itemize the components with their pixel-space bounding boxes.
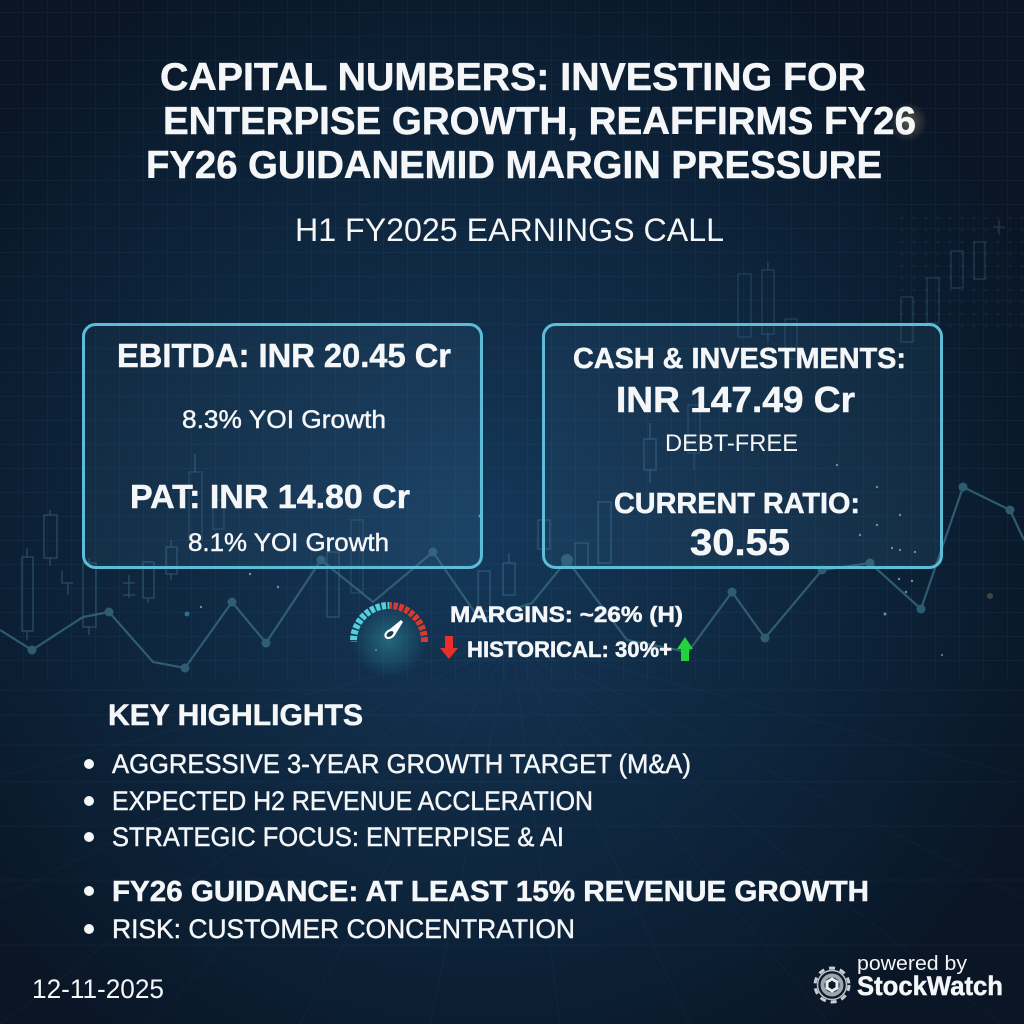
date: 12-11-2025 [32,974,164,1004]
particles [184,464,993,656]
highlight 5: RISK: CUSTOMER CONCENTRATION [112,914,575,944]
current ratio value: 30.55 [690,522,790,563]
highlight 2: EXPECTED H2 REVENUE ACCLERATION [112,786,593,816]
highlight 4: FY26 GUIDANCE: AT LEAST 15% REVENUE GROWTH [112,876,869,908]
title: FY26 GUIDANEMID MARGIN PRESSURE [146,144,882,187]
logo: powered by StockWatch [815,953,1003,1002]
cash label: CASH & INVESTMENTS: [573,343,906,375]
EBITDA growth: 8.3% YOI Growth [182,406,386,434]
icon: gear [815,968,849,1002]
cash value: INR 147.49 Cr [616,379,855,420]
key highlights list [84,749,869,944]
PAT growth: 8.1% YOI Growth [188,529,389,557]
PAT value: PAT: INR 14.80 Cr [130,478,410,515]
icon: margin gauge [351,602,427,678]
highlight 1: AGGRESSIVE 3-YEAR GROWTH TARGET (M&A) [112,749,691,779]
icon: green up arrow [677,637,693,661]
logo: powered by StockWatch: powered by [857,953,967,975]
debt free: DEBT-FREE [665,430,798,457]
heading: key highlights: KEY HIGHLIGHTS [108,699,363,732]
margins text: MARGINS: ~26% (H) [450,602,683,627]
EBITDA value: EBITDA: INR 20.45 Cr [117,337,451,374]
icon: red down arrow [440,636,458,659]
highlight 3: STRATEGIC FOCUS: ENTERPISE & AI [112,822,564,852]
panel: cash and current ratio [544,324,942,568]
current ratio label: CURRENT RATIO: [614,488,860,520]
background line chart [0,482,1024,672]
title: ENTERPISE GROWTH, REAFFIRMS FY26 [163,100,916,143]
historical text: HISTORICAL: 30%+ [467,637,672,662]
logo: powered by StockWatch: StockWatch [857,971,1003,1001]
background candlesticks [22,220,1005,640]
subtitle: H1 FY2025 EARNINGS CALL [295,212,724,248]
panel: EBITDA and PAT [84,324,482,568]
title [146,56,916,187]
title: CAPITAL NUMBERS: INVESTING FOR [160,56,866,99]
